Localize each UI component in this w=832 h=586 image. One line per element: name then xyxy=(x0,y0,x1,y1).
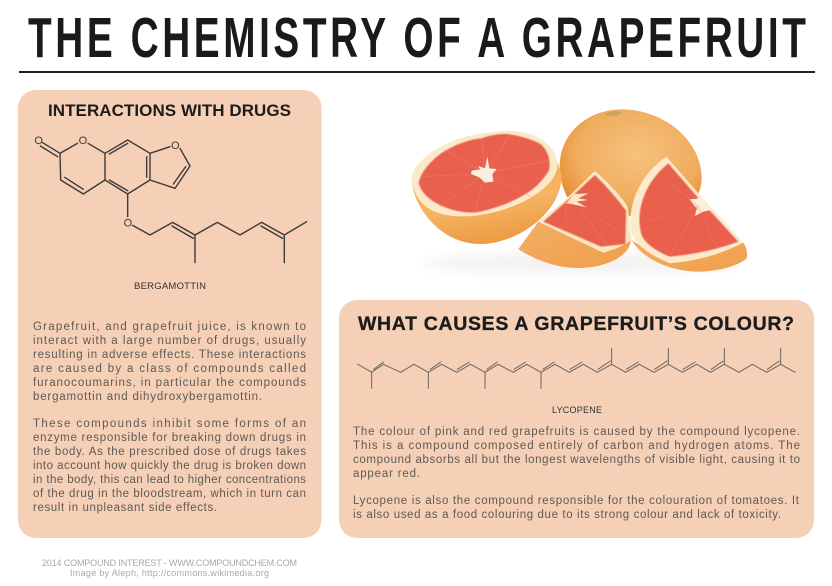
text block: interactions description: result in unpleasant side effects. xyxy=(33,502,217,514)
text block: interactions description: of the drug in the bloodstream, which in turn can xyxy=(33,488,306,500)
text block: interactions description xyxy=(33,321,306,514)
panel: interactions with drugs xyxy=(18,90,322,538)
chart: bergamottin molecule xyxy=(34,135,307,263)
text block: colour description: This is a compound composed entirely of carbon and hydrogen atoms. The xyxy=(353,440,800,452)
chart: lycopene molecule xyxy=(357,348,795,388)
footer credits: 2014 COMPOUND INTEREST - WWW.COMPOUNDCHEM.COM xyxy=(42,558,297,568)
text block: colour description: is also used as a food colouring due to its strong colour and lack of toxicity. xyxy=(353,509,781,521)
label: lycopene: LYCOPENE xyxy=(552,405,602,415)
text block: interactions description: These compounds inhibit some forms of an xyxy=(33,418,306,430)
title: THE CHEMISTRY OF A GRAPEFRUIT xyxy=(28,7,806,70)
text block: interactions description: in the body, this can lead to higher concentrations xyxy=(33,474,306,486)
text block: colour description: Lycopene is also the compound responsible for the colouration of tomatoes. It xyxy=(353,495,800,507)
text block: colour description xyxy=(353,426,800,521)
footer credits xyxy=(42,558,297,578)
text block: colour description: compound absorbs all but the longest wavelengths of visible light, causing it to xyxy=(353,454,800,466)
footer credits: Image by Aleph, http://commons.wikimedia.org xyxy=(70,568,269,578)
heading: interactions with drugs: INTERACTIONS WITH DRUGS xyxy=(48,101,291,120)
text block: interactions description: furanocoumarins, in particular the compounds xyxy=(33,377,306,389)
text block: interactions description: Grapefruit, and grapefruit juice, is known to xyxy=(33,321,306,333)
text block: colour description: appear red. xyxy=(353,468,420,480)
chart: bergamottin molecule: O xyxy=(34,135,43,147)
chart: bergamottin molecule: O xyxy=(171,140,180,152)
heading: what causes a grapefruit's colour: WHAT CAUSES A GRAPEFRUIT’S COLOUR? xyxy=(358,313,794,335)
text block: interactions description: into account how quickly the drug is broken down xyxy=(33,460,306,472)
panel: what causes a grapefruit's colour xyxy=(339,300,814,538)
text block: colour description: The colour of pink and red grapefruits is caused by the compound lycopene. xyxy=(353,426,800,438)
label: bergamottin: BERGAMOTTIN xyxy=(134,281,206,292)
text block: interactions description: are caused by a class of compounds called xyxy=(33,363,306,375)
text block: interactions description: enzyme responsible for breaking down drugs in xyxy=(33,432,306,444)
text block: interactions description: interact with a large number of drugs, usually xyxy=(33,335,306,347)
chart: bergamottin molecule: O xyxy=(79,135,88,147)
image: grapefruit halves and wedges xyxy=(412,109,747,275)
text block: interactions description: bergamottin and dihydroxybergamottin. xyxy=(33,391,262,403)
text block: interactions description: the body. As the prescribed dose of drugs takes xyxy=(33,446,306,458)
text block: interactions description: resulting in adverse effects. These interactions xyxy=(33,349,306,361)
chart: bergamottin molecule: O xyxy=(124,217,133,229)
